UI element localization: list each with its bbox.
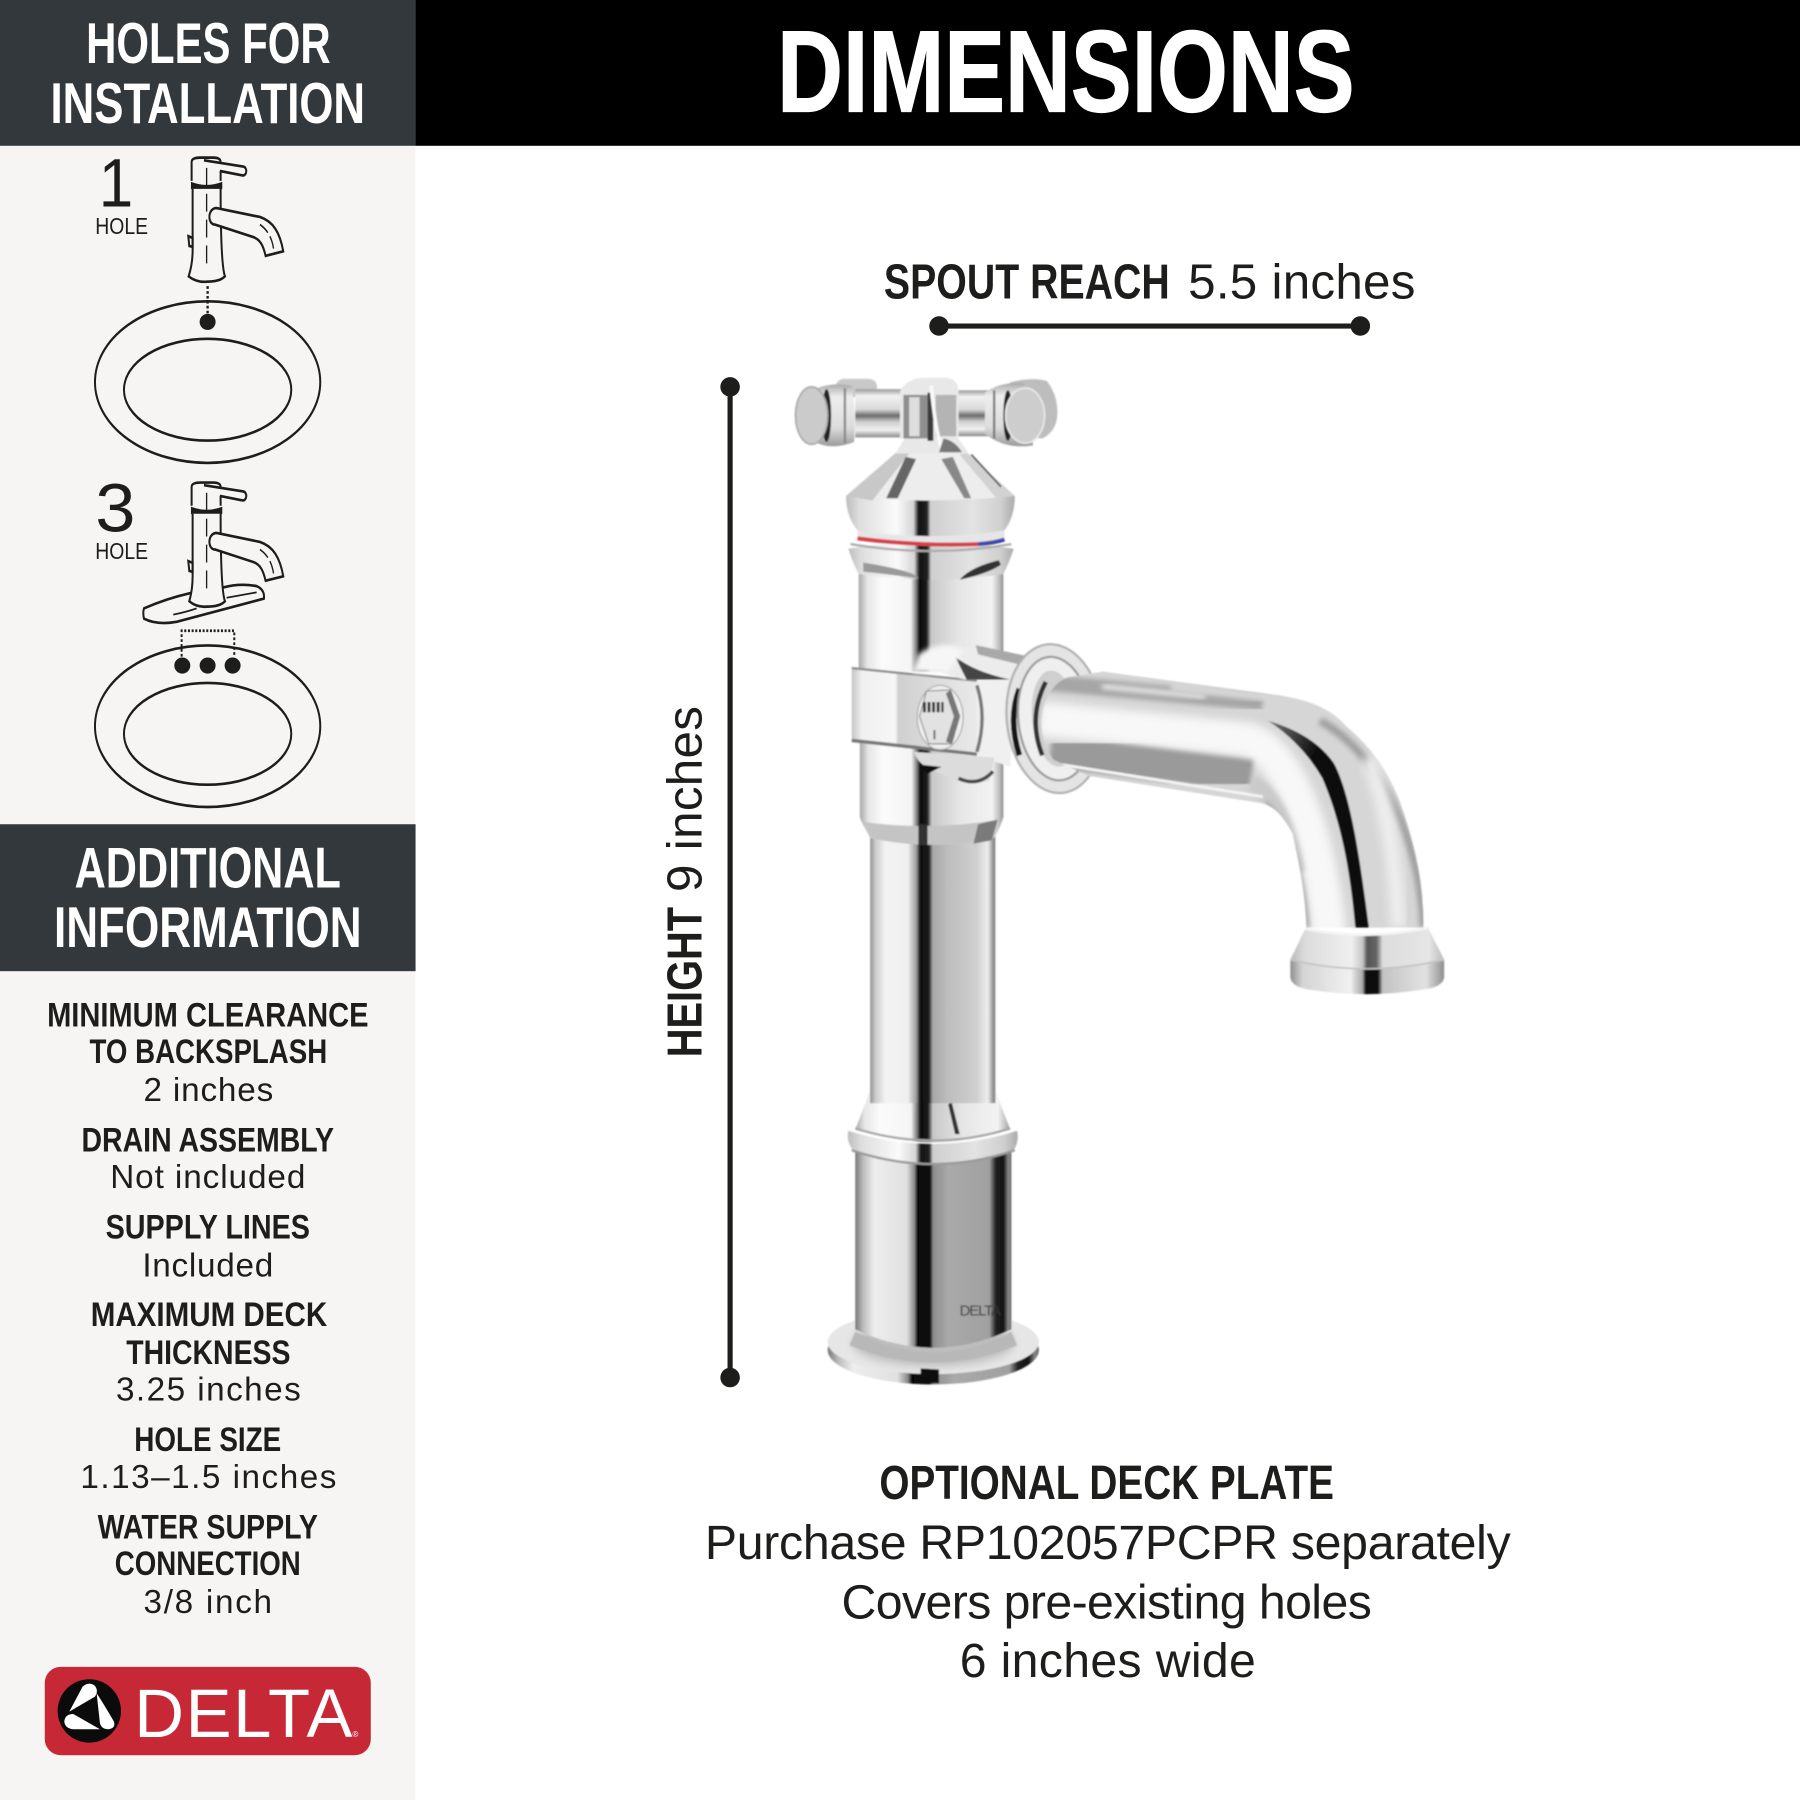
text: hole size: 1.13–1.5 inches: [80, 1459, 336, 1496]
icon: three-hole faucet with deck plate and sink: [95, 483, 320, 807]
dimension: spout reach: SPOUT REACH: [884, 254, 1170, 309]
text: water supply connection: [98, 1508, 318, 1621]
lower collar: [848, 1091, 1018, 1164]
text: water supply connection: WATER SUPPLY: [98, 1508, 318, 1546]
dimension: height: 9 inches: [657, 706, 712, 892]
heading: holes for installation: HOLES FOR: [86, 12, 331, 76]
text: water supply connection: CONNECTION: [115, 1545, 301, 1583]
upper column tube: [859, 568, 1003, 672]
title: dimensions: [416, 0, 1800, 146]
upper collar: [860, 735, 1003, 845]
spout flange: [999, 639, 1111, 798]
text: optional deck plate: OPTIONAL DECK PLATE: [879, 1456, 1334, 1510]
text: optional deck plate: Purchase RP102057PCPR separately: [705, 1516, 1511, 1570]
text: maximum deck thickness: [91, 1296, 327, 1409]
text: minimum clearance: 2 inches: [143, 1072, 273, 1109]
clamp band: [852, 668, 977, 754]
text: minimum clearance: MINIMUM CLEARANCE: [47, 996, 368, 1034]
shoulder ring: [848, 542, 1014, 580]
heading: holes for installation: [0, 0, 416, 146]
label: 3 hole: 3: [95, 470, 135, 547]
spout tube: [1041, 671, 1424, 929]
heading: holes for installation: INSTALLATION: [51, 72, 365, 136]
text: maximum deck thickness: 3.25 inches: [116, 1372, 301, 1409]
connector to spout: [913, 645, 1030, 783]
label: 1 hole: [95, 145, 148, 239]
lower column: [855, 1150, 1011, 1348]
label: 1 hole: 1: [99, 145, 133, 222]
dimension: height: [657, 377, 740, 1387]
text: maximum deck thickness: THICKNESS: [126, 1334, 290, 1372]
label: 1 hole: HOLE: [95, 213, 148, 239]
icon: one-hole faucet and sink: [95, 158, 320, 463]
label: 3 hole: HOLE: [95, 538, 148, 564]
spout nozzle: [1290, 928, 1444, 994]
text: supply lines: [106, 1209, 310, 1285]
dimension: spout reach: [884, 254, 1415, 336]
label: 3 hole: [95, 470, 148, 564]
logo: Delta: DELTA: [134, 1675, 352, 1752]
logo: Delta: [45, 1667, 371, 1755]
text: optional deck plate: 6 inches wide: [960, 1634, 1256, 1688]
heading: additional information: ADDITIONAL: [75, 836, 341, 900]
text: optional deck plate: [705, 1456, 1511, 1688]
text: supply lines: Included: [142, 1248, 273, 1285]
long column tube: [870, 832, 995, 1103]
cross handle: [796, 378, 1057, 453]
base flange: [828, 1310, 1039, 1384]
text: drain assembly: DRAIN ASSEMBLY: [82, 1121, 334, 1159]
handle cone: [846, 452, 1015, 501]
heading: additional information: INFORMATION: [54, 896, 362, 960]
handle hub: [846, 490, 1015, 536]
text: hole size: [80, 1421, 336, 1496]
faucet photo: [796, 378, 1446, 1384]
logo: Delta: ®: [352, 1730, 358, 1739]
text: minimum clearance: [47, 996, 368, 1109]
panel: left sidebar: [0, 0, 416, 1800]
text: Delta mark on faucet: DELTA: [960, 1303, 1001, 1320]
hot and cold indicator ring: [858, 529, 1004, 545]
text: water supply connection: 3/8 inch: [143, 1584, 272, 1621]
heading: additional information: [0, 824, 416, 971]
text: optional deck plate: Covers pre-existing holes: [841, 1576, 1372, 1630]
hex nut with Delta mark: [917, 685, 963, 750]
text: hole size: HOLE SIZE: [134, 1421, 281, 1459]
text: supply lines: SUPPLY LINES: [106, 1209, 310, 1247]
text: drain assembly: Not included: [110, 1159, 305, 1196]
text: maximum deck thickness: MAXIMUM DECK: [91, 1296, 327, 1334]
text: minimum clearance: TO BACKSPLASH: [90, 1033, 327, 1071]
text: drain assembly: [82, 1121, 334, 1196]
dimension: height: HEIGHT: [657, 907, 712, 1057]
title: dimensions: DIMENSIONS: [777, 6, 1355, 136]
dimension: spout reach: 5.5 inches: [1188, 254, 1415, 309]
